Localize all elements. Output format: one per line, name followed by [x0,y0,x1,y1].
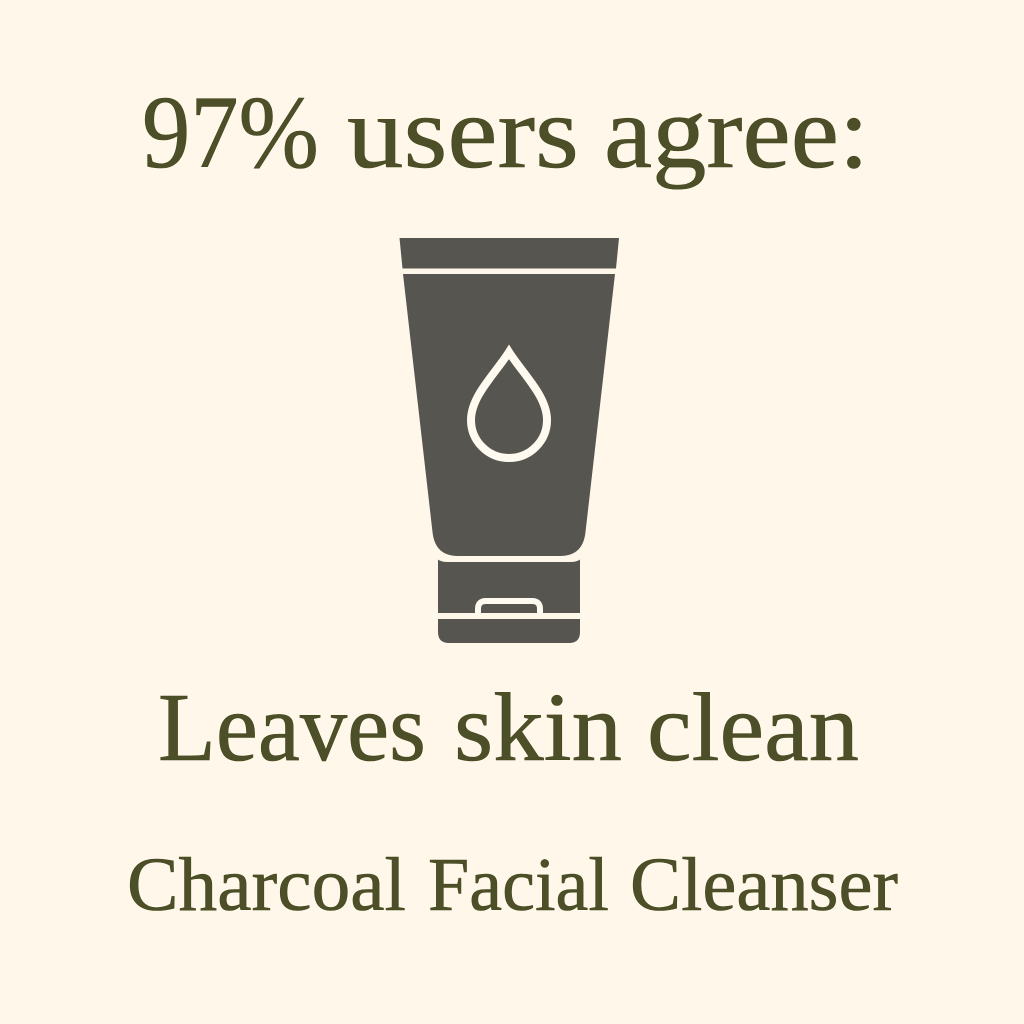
title: agree: [604,75,869,190]
benefit text: Leaves [158,674,426,782]
title [142,75,869,190]
tube cap [438,560,580,613]
cap base [438,619,580,643]
benefit text [158,674,859,782]
product name: Cleanser [630,843,898,927]
title: users [347,75,579,190]
product name: Facial [428,843,609,927]
icon: water drop [471,352,547,458]
title: 97% [142,75,319,190]
tube crimp [400,238,619,268]
product name: Charcoal [127,843,406,927]
tube body [403,274,615,556]
benefit text: clean [647,674,859,782]
product name [127,843,898,927]
benefit text: skin [454,674,622,782]
cap notch [478,601,540,614]
icon: cleanser tube [400,238,619,643]
